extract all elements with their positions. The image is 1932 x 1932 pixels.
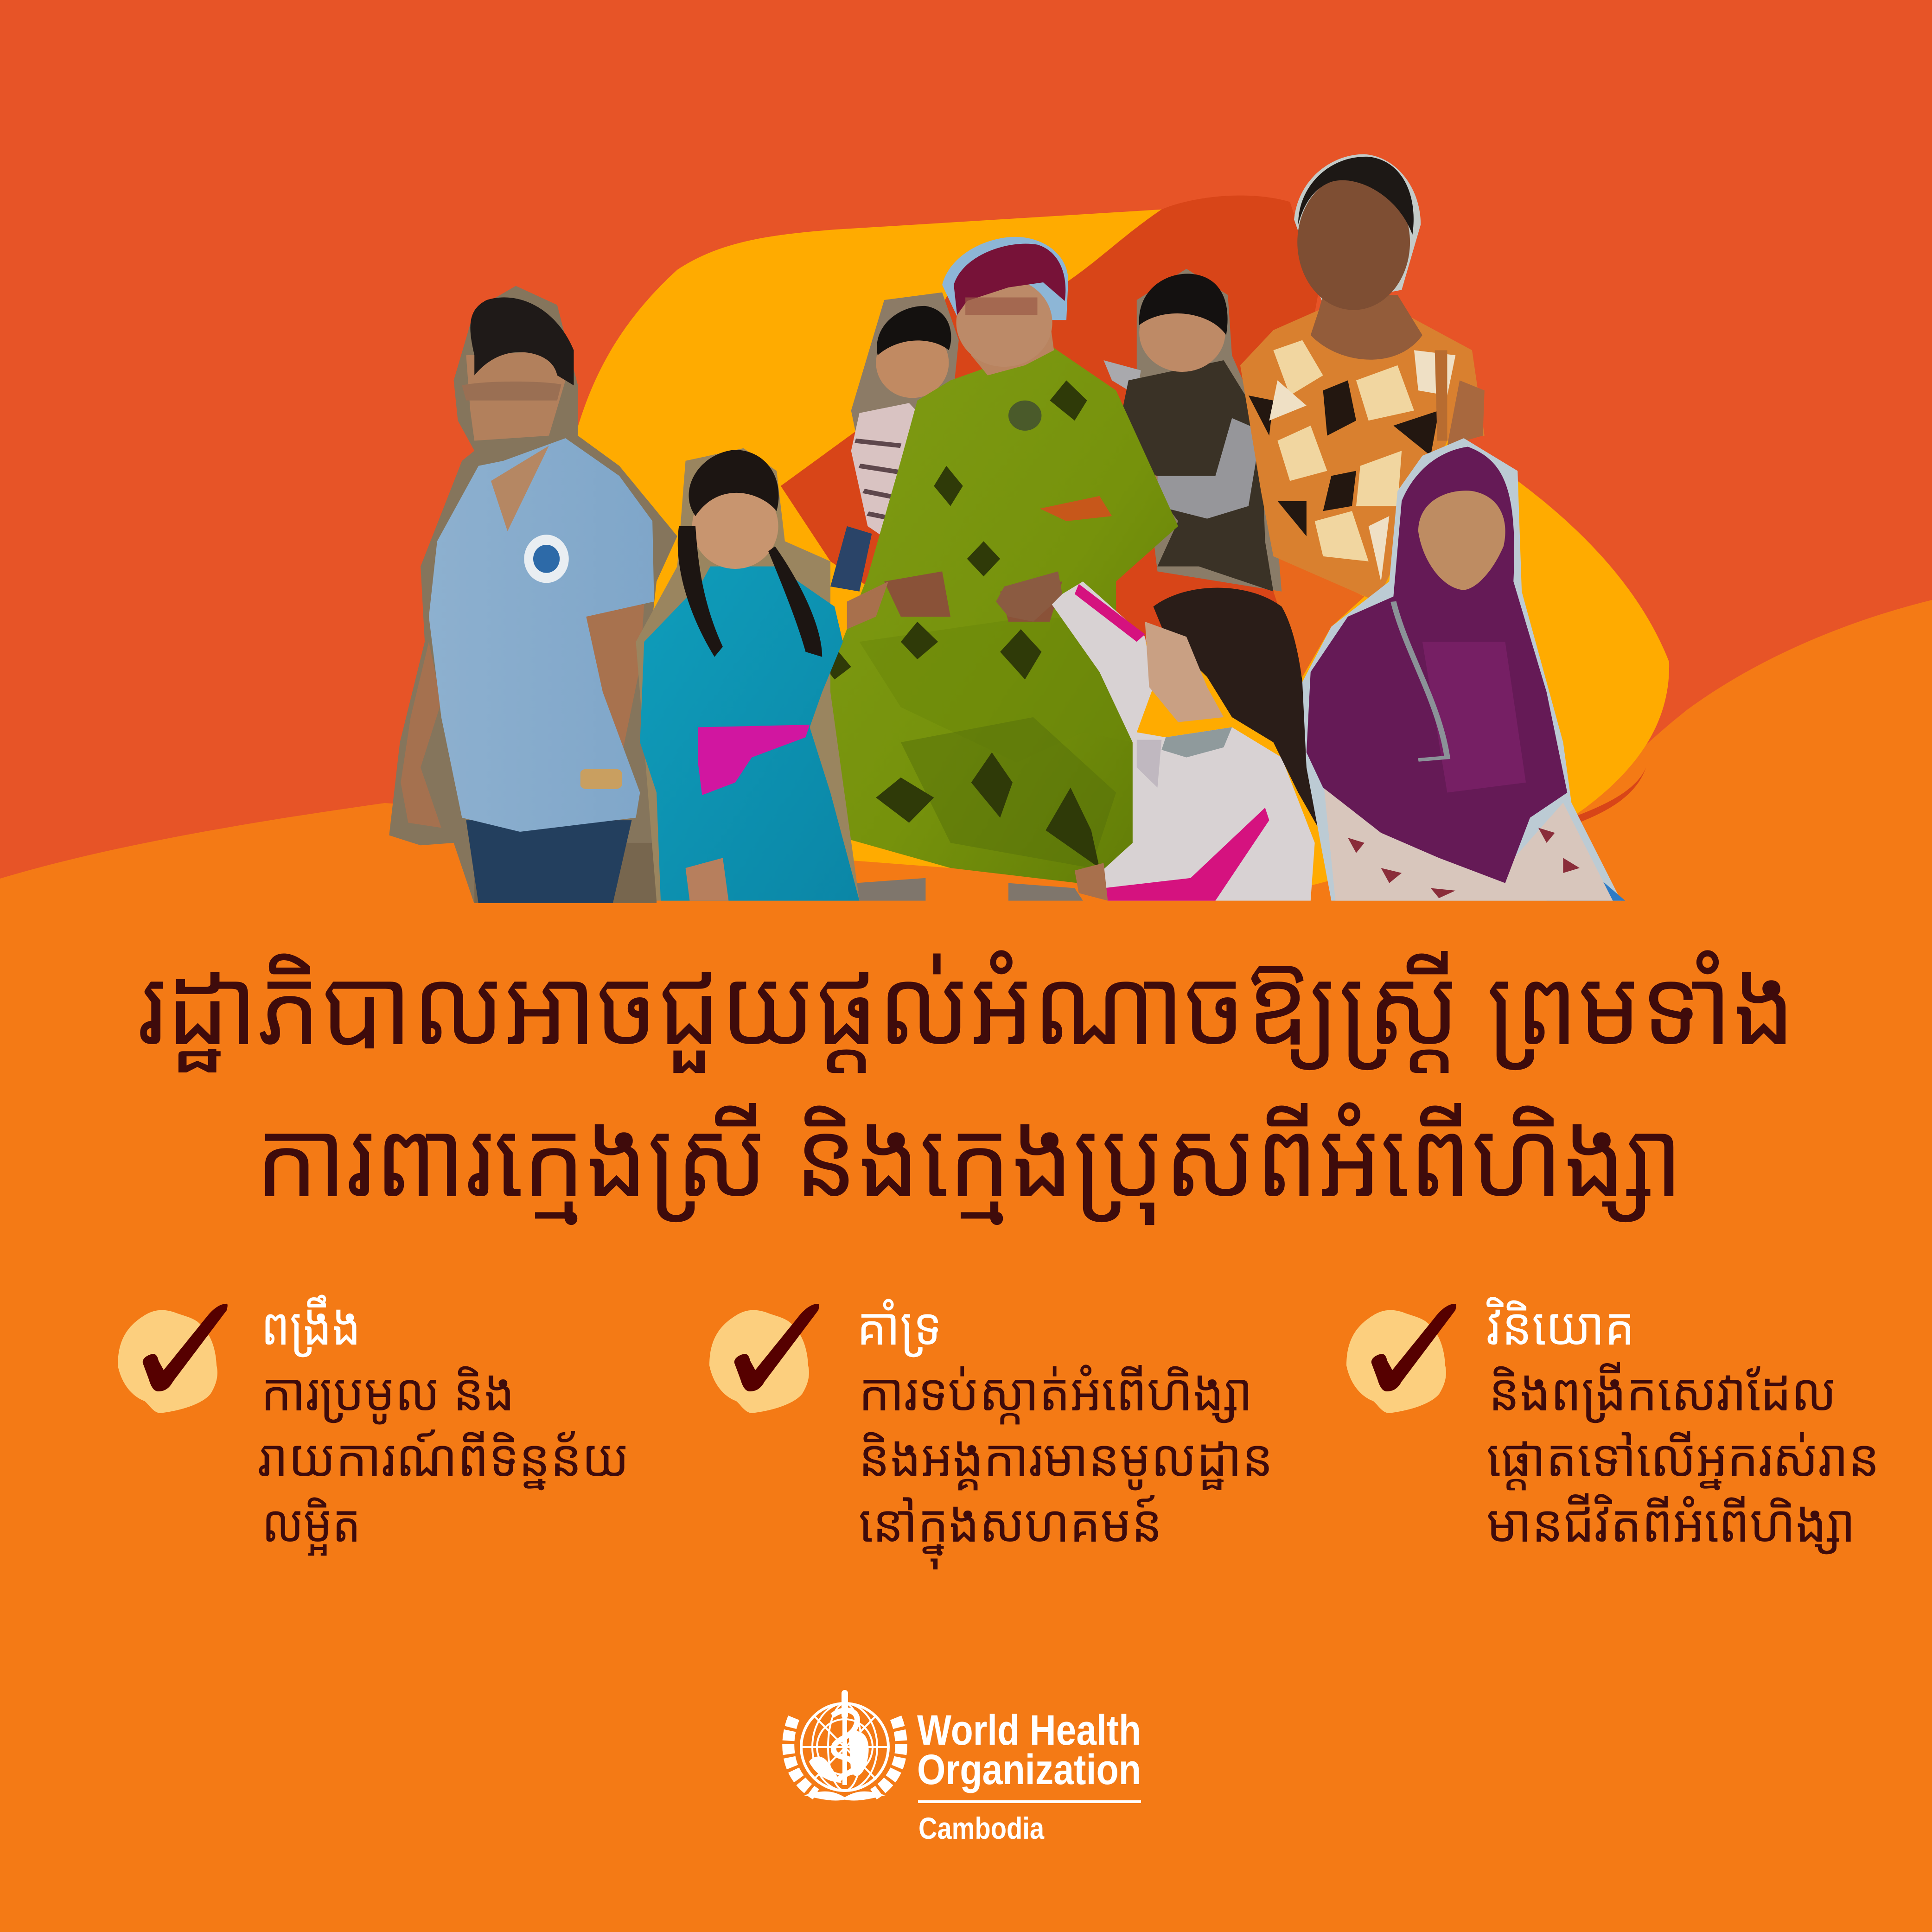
logo: World Health Organization Cambodia — [788, 1693, 1141, 1845]
text block: invest in services — [1486, 1297, 1880, 1555]
person: girl in teal dress — [636, 448, 888, 901]
person: woman in blue polo — [389, 286, 677, 904]
title: រដ្ឋាភិបាលអាចជួយផ្តល់អំណាចឱ្យស្ត្រី ព្រមទាំង — [138, 948, 1795, 1073]
text block: strengthen data: ការប្រមូល និង — [261, 1364, 515, 1424]
organisation name — [917, 1707, 1141, 1845]
icon: check in blob — [709, 1304, 819, 1413]
icon: check in blob — [1346, 1304, 1456, 1413]
text block: strengthen data: លម្អិត — [262, 1495, 361, 1556]
column 1: strengthen — [118, 1294, 629, 1556]
person: girl in white jacket — [996, 571, 1335, 901]
organisation name: Cambodia — [918, 1811, 1045, 1845]
person: left boy — [830, 293, 959, 592]
blob: yellow — [574, 210, 1669, 893]
icon: WHO emblem — [788, 1693, 901, 1800]
organisation name: Organization — [917, 1746, 1141, 1793]
text block: support prevention: និងអង្គការមានមូលដ្ឋាន — [859, 1429, 1273, 1491]
text block: invest in services: និងពង្រីកសេវាដែល — [1489, 1362, 1836, 1423]
text block: support prevention: គាំទ្រ — [857, 1298, 942, 1358]
column 3: invest — [1346, 1297, 1880, 1555]
person: health worker in purple hijab — [1302, 438, 1625, 901]
title — [138, 948, 1795, 1225]
person: woman in floral dress — [1240, 154, 1485, 601]
text block: strengthen data — [258, 1294, 629, 1556]
text block: invest in services: មានជីវិតពីអំពើហិង្សា — [1486, 1493, 1855, 1555]
background: red-orange upper wave — [0, 0, 1932, 879]
text block: invest in services: វិនិយោគ — [1486, 1297, 1635, 1356]
text block: strengthen data: ពង្រឹង — [261, 1294, 361, 1358]
person: right boy — [1087, 269, 1282, 592]
title: ការពារក្មេងស្រី និងក្មេងប្រុសពីអំពើហិង្សា — [255, 1100, 1683, 1225]
text block: support prevention — [857, 1298, 1273, 1569]
text block: support prevention: ការទប់ស្កាត់អំពើហិង្សា — [859, 1364, 1253, 1425]
orange strip below photos — [0, 903, 1932, 917]
text block: invest in services: ផ្តោតទៅលើអ្នករស់រាន — [1486, 1429, 1880, 1491]
person: elderly woman in olive dress — [822, 237, 1178, 901]
text block: strengthen data: រាយការណ៍ពីទិន្នន័យ — [258, 1429, 629, 1491]
icon: check in blob — [118, 1304, 228, 1413]
text block: support prevention: នៅក្នុងសហគមន៍ — [859, 1494, 1162, 1569]
blob: dark orange — [781, 196, 1646, 824]
photo collage: seven people with abstract blobs — [389, 154, 1669, 904]
column 2: support — [709, 1298, 1273, 1569]
organisation name: World Health — [917, 1707, 1141, 1754]
